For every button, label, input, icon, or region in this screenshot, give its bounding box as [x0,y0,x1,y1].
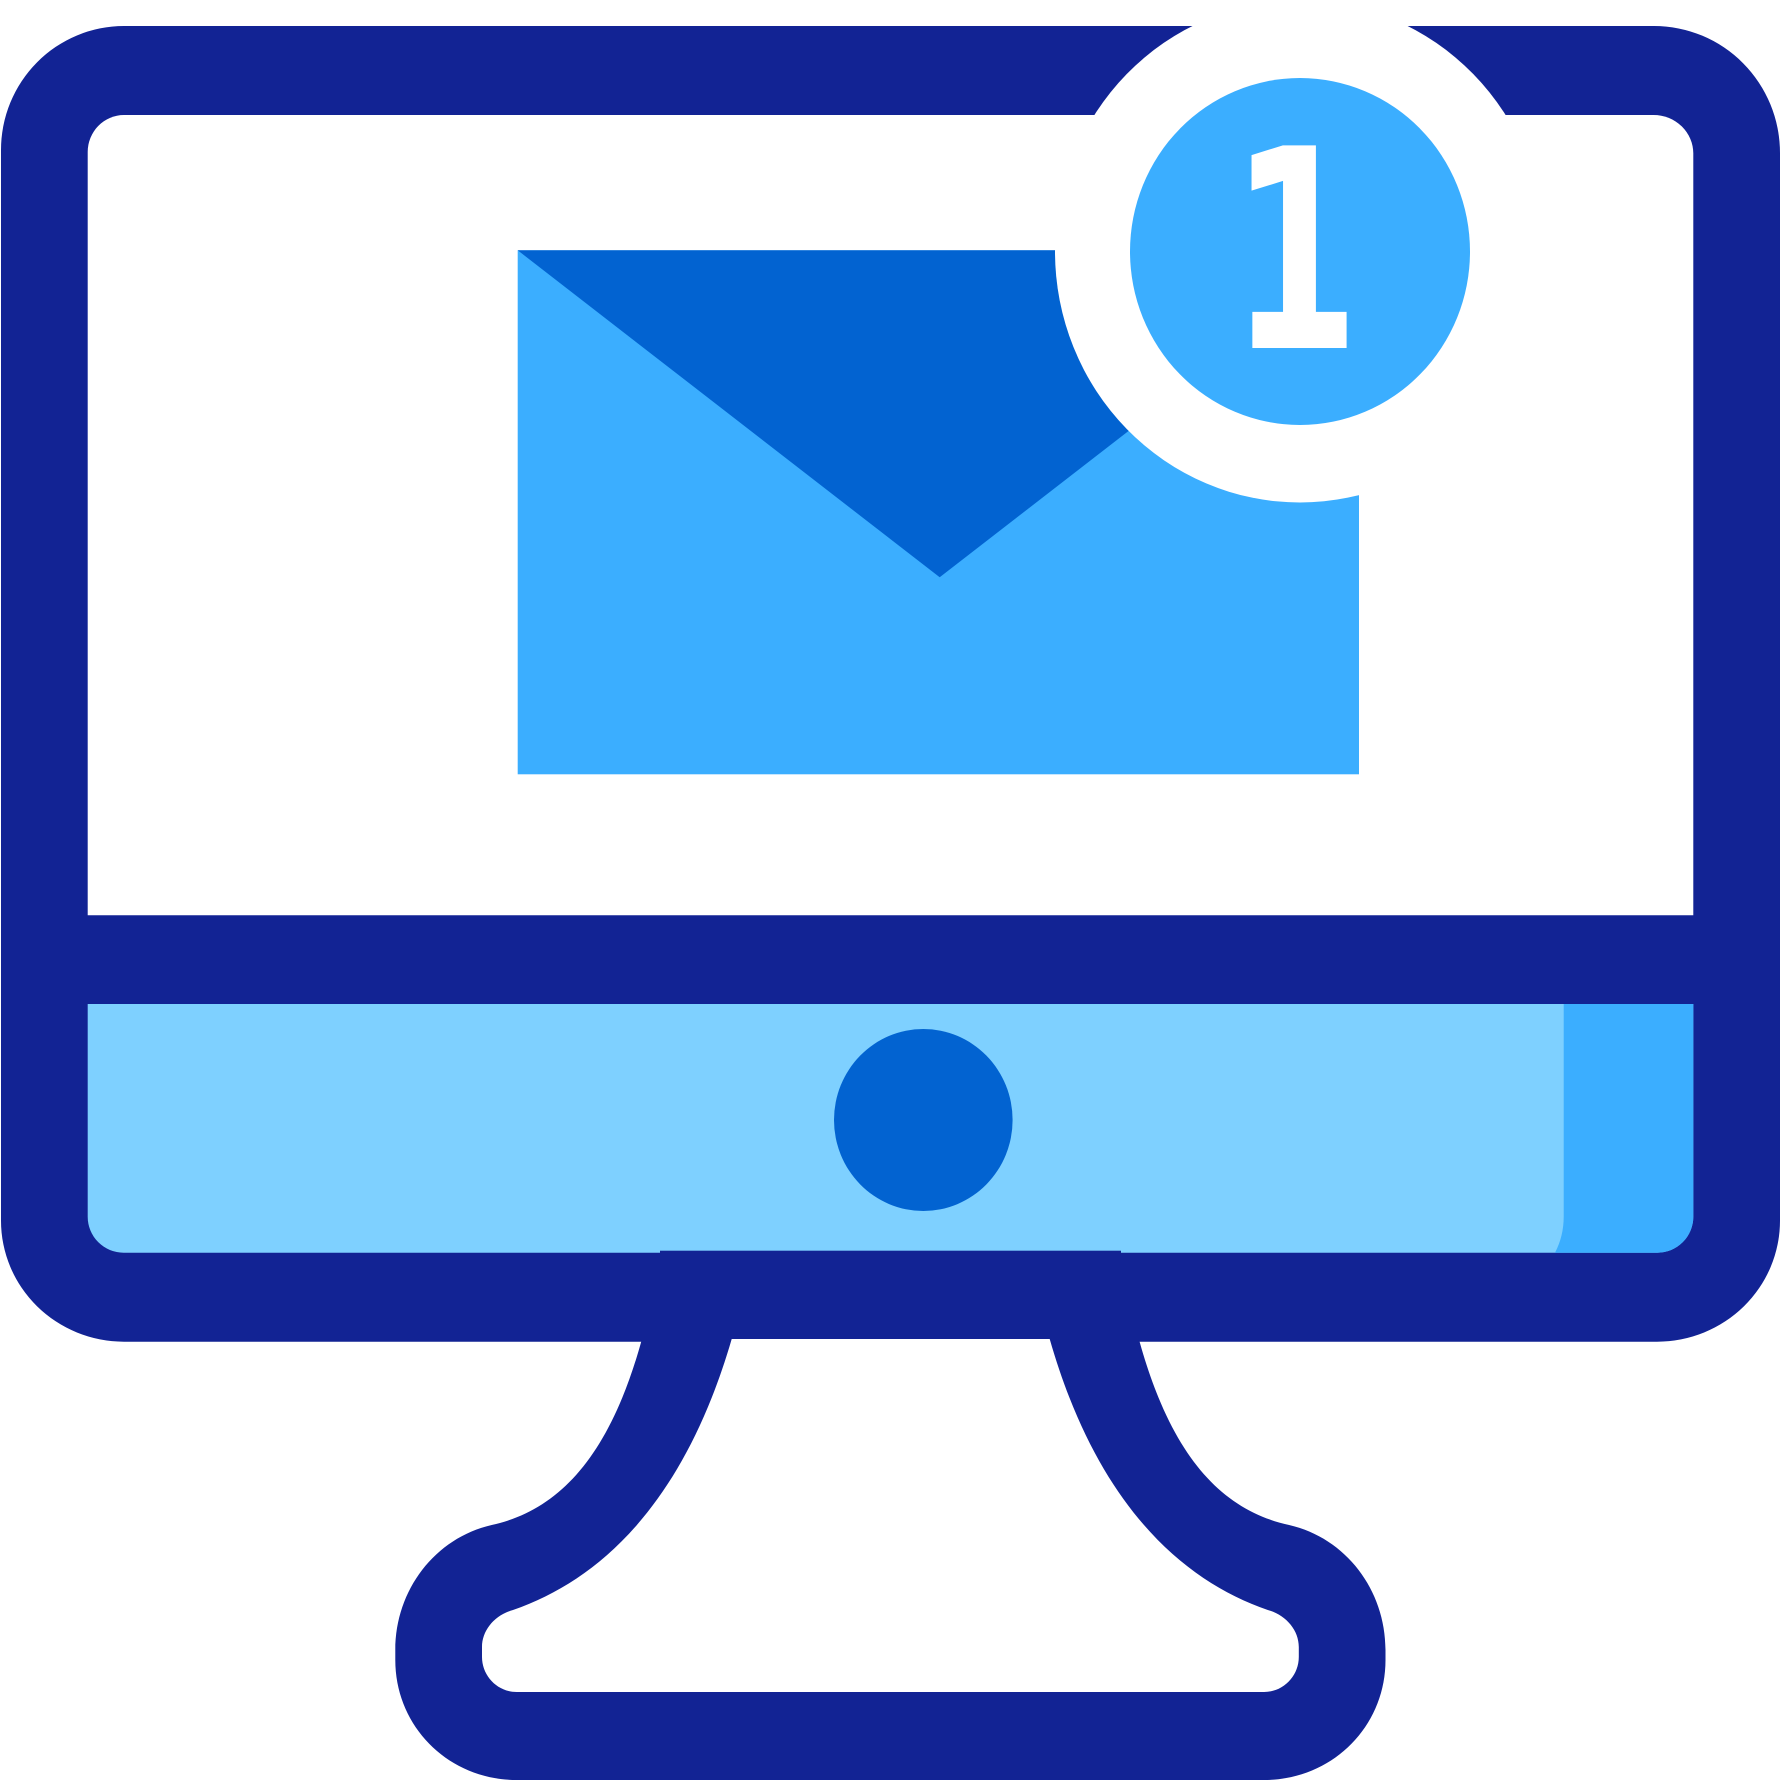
monitor bezel [1,26,1780,1342]
envelope flap [518,250,1362,577]
stand outer shape [395,1340,1386,1780]
chin panel: light blue [88,1004,1693,1253]
chin panel: shaded right band [1555,1004,1693,1253]
badge white halo [1055,0,1545,502]
stand inner opening [482,1339,1299,1692]
monitor body [1,26,1780,1342]
stand collar [660,1251,1121,1339]
monitor stand [395,1251,1386,1780]
envelope body [518,250,1359,774]
power button [834,1029,1013,1211]
badge number: 1 [1231,90,1359,414]
badge circle [1130,78,1470,425]
email envelope [518,250,1362,774]
notification badge [1055,0,1545,502]
screen: white display area [88,115,1693,915]
